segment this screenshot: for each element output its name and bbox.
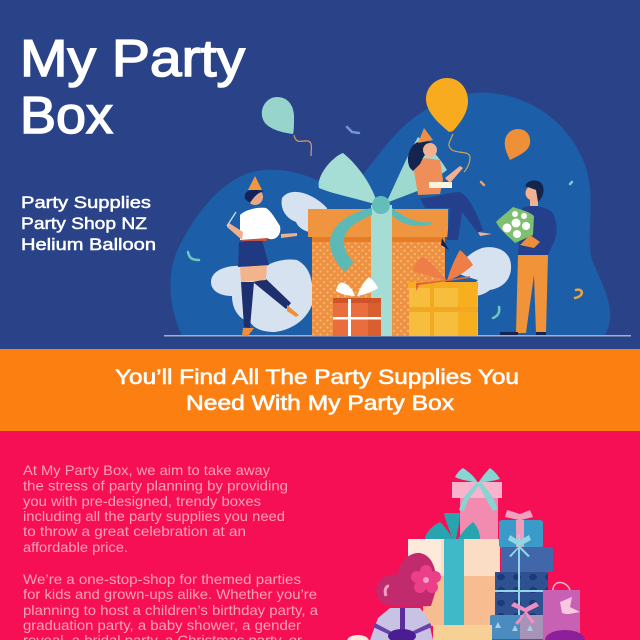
text block: intro paragraph (23, 462, 288, 555)
title: My Party (20, 30, 245, 88)
title: Box (20, 87, 113, 145)
big gift box (308, 137, 448, 336)
ground line (164, 335, 631, 336)
subtitle links: Party Shop NZ (21, 214, 147, 233)
yellow gift (408, 250, 478, 336)
text block: intro paragraph: affordable price. (23, 539, 128, 555)
balloon: teal (262, 97, 311, 156)
small red gift (333, 277, 381, 336)
confetti (188, 127, 582, 318)
background blobs (170, 93, 610, 336)
panel: hero background (0, 0, 640, 349)
illustration: party scene (164, 78, 631, 336)
text block: second paragraph: planning to host a children’s birthday party, a (23, 602, 318, 618)
illustration: gift stack (347, 468, 585, 640)
panel: pink section (0, 431, 640, 640)
text block: second paragraph: graduation party, a baby shower, a gender (23, 617, 301, 633)
shopping bag (543, 582, 585, 640)
text block: intro paragraph: At My Party Box, we aim to take away (23, 462, 270, 478)
text block: intro paragraph: to throw a great celebration at an (23, 523, 246, 539)
text block: intro paragraph: you with pre-designed, trendy boxes (23, 493, 261, 509)
lilac box with purple ribbon (370, 608, 433, 640)
heart box with flower (376, 553, 441, 607)
text block: second paragraph (23, 571, 318, 640)
leaves (211, 192, 511, 332)
white gift corner (347, 635, 369, 640)
text block: intro paragraph: including all the party supplies you need (23, 508, 285, 524)
pink top gift (452, 468, 502, 539)
man with bouquet (496, 180, 556, 335)
banner: orange (0, 349, 640, 431)
text block: second paragraph: We’re a one-stop-shop for themed parties (23, 571, 301, 587)
balloon: yellow (426, 78, 470, 172)
subtitle links (21, 193, 156, 254)
text block: second paragraph: for kids and grown-ups alike. Whether you’re (23, 586, 317, 602)
left woman with party hat (227, 176, 299, 336)
text block: intro paragraph: the stress of party planning by providing (23, 478, 288, 494)
balloon: orange (505, 129, 530, 160)
sitting woman holding balloon (408, 128, 492, 250)
cream bottom gift (433, 625, 492, 640)
blue stacked gifts (490, 510, 553, 639)
banner heading: Need With My Party Box (186, 392, 455, 415)
title (20, 30, 245, 145)
banner heading (115, 366, 519, 415)
banner heading: You’ll Find All The Party Supplies You (115, 366, 519, 389)
subtitle links: Helium Balloon (21, 235, 156, 254)
subtitle links: Party Supplies (21, 193, 151, 212)
cream gift with teal ribbon (408, 513, 500, 626)
